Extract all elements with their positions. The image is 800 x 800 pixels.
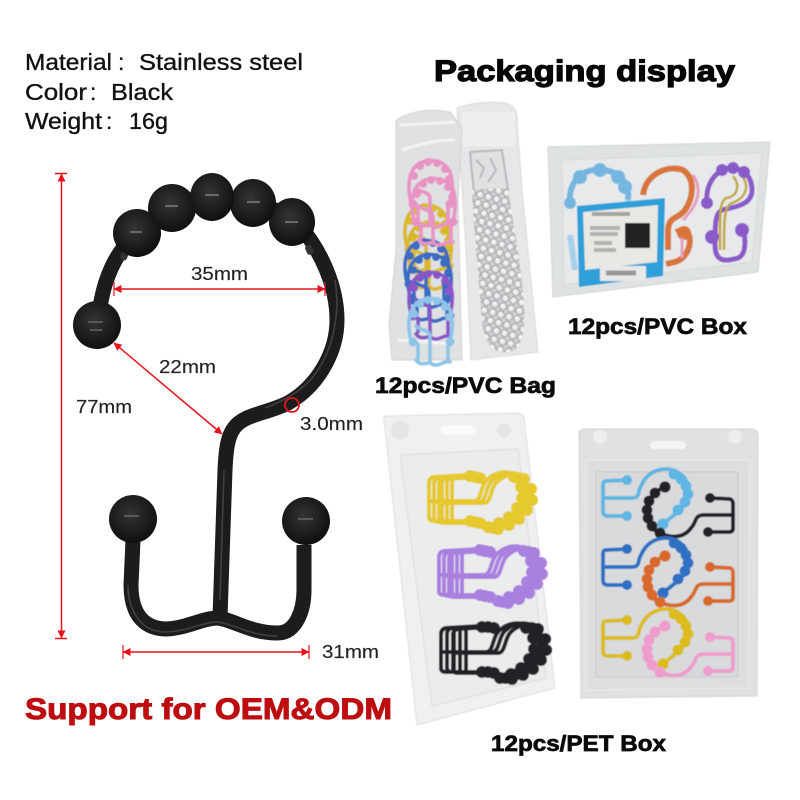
dimension: 3.0mm wire: [285, 398, 363, 434]
ball end: [73, 301, 121, 349]
dimension: 3.0mm wire: 3.0mm: [300, 414, 363, 434]
specifications text: [25, 49, 303, 134]
blue label card: [577, 198, 665, 287]
dimension: 31mm base: 31mm: [322, 642, 379, 662]
orange ring: [643, 168, 698, 264]
specifications text: 16g: [129, 108, 168, 134]
specifications text: :: [106, 108, 112, 134]
hook product photo: [73, 173, 337, 636]
dimension: 22mm opening: [114, 343, 222, 434]
ring bag: [389, 110, 462, 365]
specifications text: :: [118, 49, 124, 75]
blue ring: [564, 163, 632, 270]
beads: [113, 173, 315, 257]
row 2 hooks: [603, 538, 733, 607]
package: PVC box: [548, 142, 770, 297]
package: PVC bags: [389, 102, 538, 365]
dimension: 31mm base: [123, 642, 379, 662]
black hooks: [441, 621, 552, 685]
yellow hooks: [429, 470, 538, 535]
row 1 hooks: [603, 469, 733, 538]
dimension: 35mm width: [114, 264, 325, 296]
specifications text: Weight: [25, 108, 103, 134]
prong balls: [109, 495, 330, 545]
caption: PVC box: 12pcs/PVC Box: [568, 314, 748, 339]
specifications text: Black: [111, 79, 174, 105]
specifications text: Color: [25, 79, 87, 105]
OEM support heading: Support for OEM&ODM: [25, 693, 392, 726]
package: PET box upright: [579, 429, 758, 698]
specifications text: Material: [25, 49, 112, 75]
row 3 hooks: [603, 609, 733, 677]
dimension: 77mm height: 77mm: [76, 397, 132, 417]
specifications text: Stainless steel: [139, 49, 303, 75]
purple hooks: [439, 544, 548, 609]
dimension: 22mm opening: 22mm: [159, 357, 216, 377]
package: PET box tilted: [384, 413, 555, 725]
dimension: 35mm width: 35mm: [191, 264, 248, 284]
caption: PET box: 12pcs/PET Box: [491, 731, 667, 756]
purple ring: [701, 162, 752, 260]
specifications text: :: [90, 79, 96, 105]
chain bag: [457, 102, 538, 360]
packaging heading: Packaging display: [434, 55, 735, 88]
caption: PVC bag: 12pcs/PVC Bag: [375, 373, 556, 398]
